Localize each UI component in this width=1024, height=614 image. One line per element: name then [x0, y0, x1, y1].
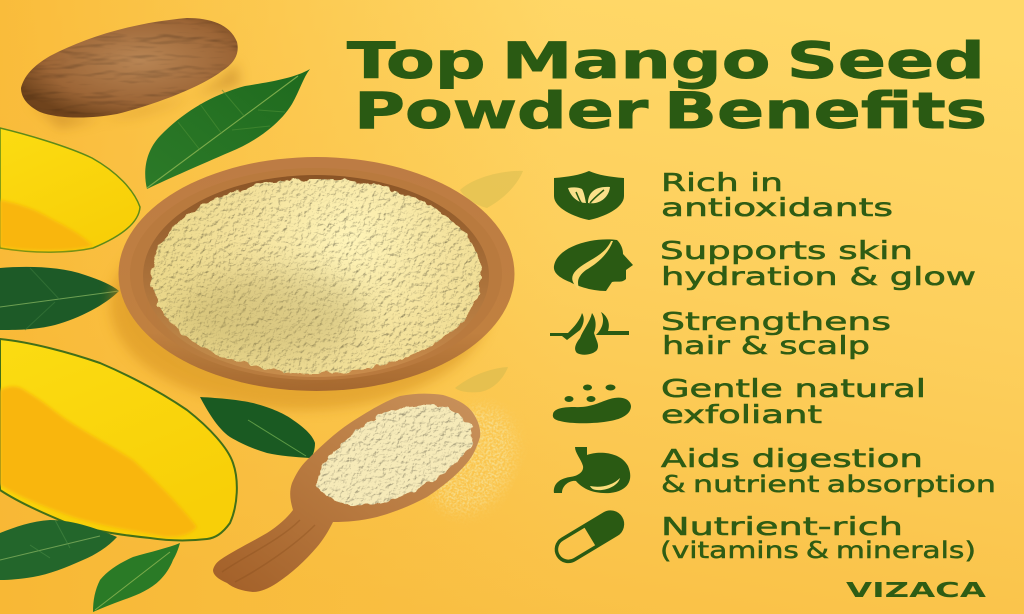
benefit: nutrient	[552, 508, 976, 566]
icon: capsule	[552, 508, 627, 566]
icon: stomach	[554, 447, 630, 493]
mango: top	[0, 128, 140, 252]
title: Powder Benefits	[354, 82, 987, 140]
leaf: top	[145, 69, 310, 189]
text: nutrient: Nutrient-rich	[661, 512, 903, 541]
benefit: skin	[554, 236, 976, 291]
benefit: antioxidants	[554, 168, 893, 222]
text: hair	[661, 307, 891, 360]
icon: scrub	[553, 384, 631, 423]
title: Top Mango Seed	[347, 32, 985, 90]
seed	[21, 18, 240, 128]
benefit: digestion	[554, 444, 996, 498]
leaf: left	[0, 267, 119, 330]
text: antioxidants	[661, 168, 893, 222]
spilled powder	[413, 393, 531, 527]
brand: VIZACA: VIZACA	[846, 578, 987, 602]
text: skin: Supports skin	[660, 236, 913, 265]
faint leaf: lower	[455, 367, 508, 392]
leaf: middle	[200, 397, 315, 458]
text: exfoliant	[661, 374, 926, 429]
text: nutrient: (vitamins & minerals)	[660, 538, 976, 564]
mango: large	[0, 339, 237, 540]
leaf: bottom left	[0, 520, 117, 580]
benefit: exfoliant	[553, 374, 926, 429]
text: digestion: Aids digestion	[661, 444, 923, 473]
text: exfoliant: exfoliant	[661, 400, 822, 429]
icon: hair follicle	[550, 312, 629, 355]
powder in bowl	[151, 179, 481, 373]
text: digestion: & nutrient absorption	[661, 472, 996, 498]
icon: woman head	[554, 239, 633, 291]
text: antioxidants: antioxidants	[661, 193, 893, 222]
text: exfoliant: Gentle natural	[661, 374, 926, 403]
text: hair: hair & scalp	[662, 331, 870, 360]
leaf: bottom	[93, 543, 180, 612]
icon: shield with leaves	[554, 171, 624, 220]
faint leaf: upper	[460, 171, 523, 208]
title	[347, 32, 987, 140]
benefit: hair	[550, 307, 891, 360]
text: antioxidants: Rich in	[661, 168, 783, 197]
bowl	[110, 157, 514, 410]
text: digestion	[661, 444, 996, 498]
scoop	[213, 394, 480, 592]
text: nutrient	[660, 512, 976, 564]
text: skin: hydration & glow	[661, 262, 976, 291]
text: skin	[660, 236, 976, 291]
powder in scoop	[316, 405, 472, 505]
text: hair: Strengthens	[661, 307, 891, 336]
